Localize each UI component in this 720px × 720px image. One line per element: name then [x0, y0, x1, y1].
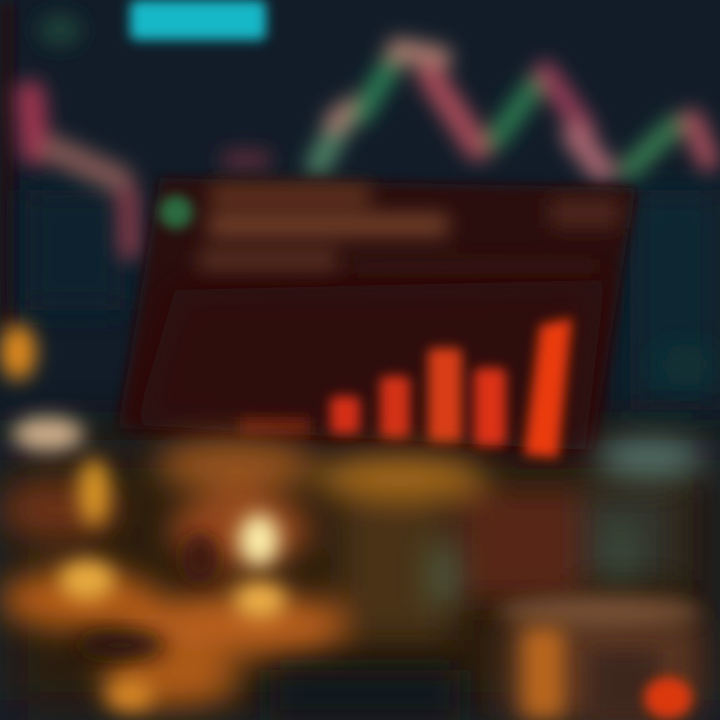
panel: dark chart window	[118, 178, 636, 450]
panel green icon	[159, 195, 193, 229]
candlestick line: upper right	[318, 50, 708, 170]
glowing highlights on coins	[0, 324, 286, 711]
coins: main orange pile	[0, 439, 680, 720]
small green glow top left	[38, 14, 82, 46]
coin stack bottom right	[500, 596, 700, 720]
cyan label top left	[130, 0, 266, 40]
panel header text blur	[198, 186, 620, 270]
bar chart: red bars	[240, 318, 572, 458]
teal reflections right side	[432, 353, 713, 605]
candlestick line: upper left	[30, 95, 262, 250]
